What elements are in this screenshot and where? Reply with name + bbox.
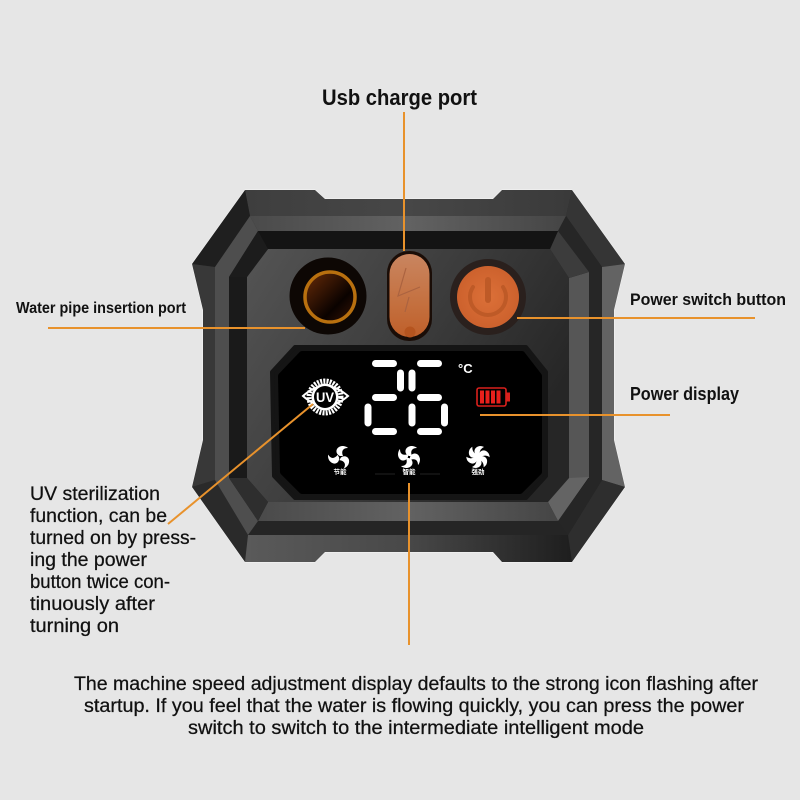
text: UV sterilization description: turning on [30,616,119,637]
fan icon: strong: 强劲 [472,467,485,476]
front plate [247,249,569,502]
text: UV sterilization description: function, can be [30,506,167,527]
label: water pipe insertion port: Water pipe insertion port [16,300,187,317]
left edge [192,264,215,487]
upper right plate corner [550,231,589,278]
text: UV sterilization description [30,484,196,637]
fan icon: smart [398,446,420,476]
temperature digits [368,364,444,432]
right edge [602,264,625,487]
upper left corner bevel [192,190,250,267]
bottom bevel [245,535,572,562]
fan icon: eco [326,446,351,476]
text: speed adjustment description: startup. If you feel that the water is flowing quickly, you can press the power [84,696,745,717]
label: power switch button: Power switch button [630,290,786,309]
fan icon: eco: 节能 [334,467,347,476]
lower right plate corner [548,477,589,521]
text: UV sterilization description: UV sterilization [30,484,160,505]
fan icon: smart: 智能 [402,467,416,476]
lower left corner bevel [192,480,250,562]
left plate corner [229,231,268,277]
battery icon [477,388,510,406]
top plate recess [258,231,558,249]
text: UV sterilization description: tinuously after [30,594,156,615]
celsius unit: °C [458,361,473,376]
fan icon: strong [465,446,491,476]
text: speed adjustment description: The machine speed adjustment display defaults to the strong icon flashing after [74,674,759,695]
lower right corner bevel [568,480,625,562]
text: UV sterilization description: button twice con- [30,572,170,593]
lightning mark [398,268,420,312]
label: power display: Power display [630,384,739,404]
text: speed adjustment description: switch to switch to the intermediate intelligent mode [188,718,644,739]
recess [229,231,589,521]
leader lines [48,112,755,645]
water pipe port [290,258,366,334]
display screen [272,347,546,498]
UV icon: UV [316,389,335,405]
second layer band [215,216,602,535]
power button [450,259,526,335]
label: usb charge port: Usb charge port [322,85,478,110]
text: speed adjustment description [74,674,759,739]
device body [192,190,625,562]
text: UV sterilization description: turned on by press- [30,528,196,549]
usb port cover [387,251,432,341]
power icon [470,280,506,315]
right recess wall [558,216,602,535]
lower left plate corner [229,478,268,521]
top band [250,216,566,231]
top bevel [245,190,572,216]
outer shell [192,190,625,562]
upper right corner bevel [566,190,625,267]
right plate strip [569,272,589,478]
bottom plate strip [258,502,558,521]
left recess wall [215,216,258,535]
UV icon [303,381,348,413]
text: UV sterilization description: ing the power [30,550,148,571]
